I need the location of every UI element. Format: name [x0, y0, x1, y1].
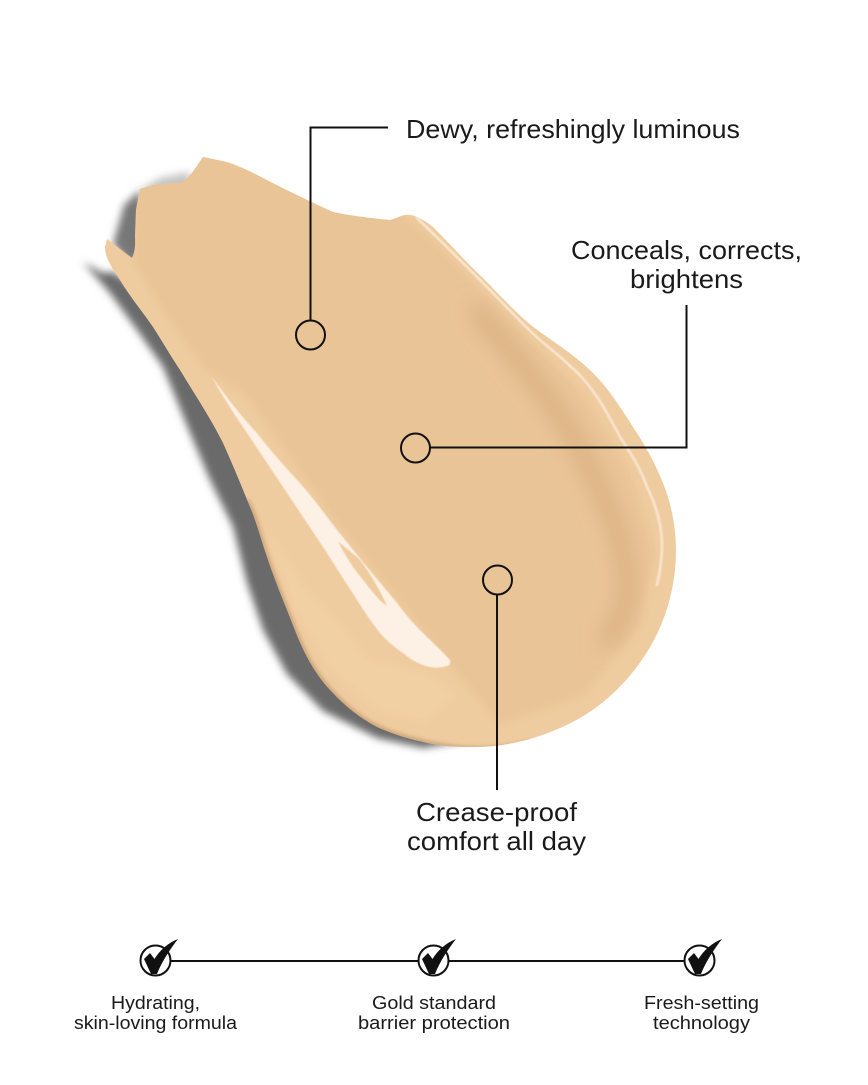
- foundation swatch: [105, 150, 676, 749]
- benefit: barrier: [358, 993, 510, 1033]
- icon: check fresh-setting: [684, 939, 722, 976]
- label: conceals: [571, 235, 802, 294]
- icon: check hydrating: [140, 939, 178, 976]
- highlight: left gloss: [212, 377, 450, 668]
- connector: luminous: [310, 128, 388, 320]
- swatch centre tone: [132, 157, 406, 258]
- highlight: right rim lower: [570, 366, 662, 585]
- highlight: right rim: [417, 218, 570, 366]
- label: conceals: brightens: [630, 264, 743, 294]
- callout: luminous: [296, 114, 740, 350]
- benefits timeline line: [171, 960, 684, 962]
- benefit: hydrating: Hydrating,: [111, 993, 200, 1013]
- marker: crease-proof: [483, 566, 512, 594]
- benefit: hydrating: skin-loving formula: [74, 1013, 238, 1033]
- callout: crease-proof: [407, 566, 586, 856]
- marker: luminous: [296, 320, 325, 350]
- label: luminous: Dewy, refreshingly luminous: [406, 114, 740, 144]
- swatch bottom edge shading: [247, 500, 530, 749]
- label: crease-proof: Crease-proof: [416, 797, 578, 827]
- label: crease-proof: comfort all day: [407, 826, 586, 856]
- callout: conceals: [401, 235, 802, 462]
- icon: check barrier: [418, 939, 456, 976]
- swatch shadow: [83, 172, 470, 748]
- benefit: fresh-setting: technology: [653, 1013, 750, 1033]
- swatch inner darker band: [478, 312, 627, 640]
- connector: crease-proof: [496, 595, 498, 790]
- benefit: fresh-setting: Fresh-setting: [644, 993, 759, 1013]
- label: conceals: Conceals, corrects,: [571, 235, 802, 265]
- benefit: barrier: barrier protection: [358, 1013, 510, 1033]
- benefit: hydrating: [74, 993, 238, 1033]
- swatch soft lower light: [262, 520, 455, 722]
- marker: conceals: [401, 434, 430, 462]
- benefit: barrier: Gold standard: [372, 993, 496, 1013]
- label: crease-proof: [407, 797, 586, 856]
- connector: conceals: [430, 305, 686, 448]
- benefit: fresh-setting: [644, 993, 759, 1033]
